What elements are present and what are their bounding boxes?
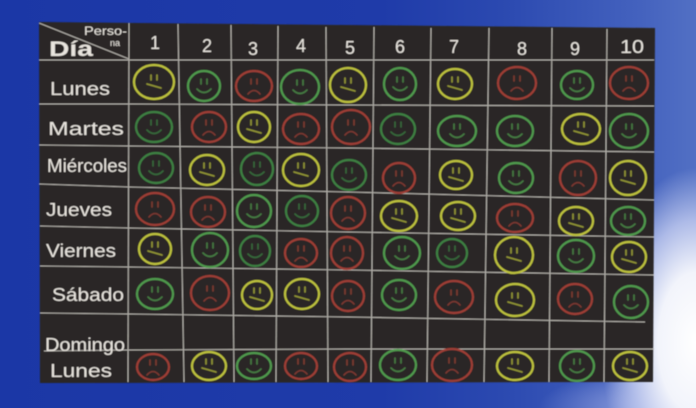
face 1 green bbox=[137, 279, 173, 309]
face 2 red bbox=[191, 197, 225, 227]
column numbers: 2 bbox=[202, 36, 212, 56]
row: Miércoles faces bbox=[139, 153, 646, 195]
face 7 red bbox=[432, 349, 472, 381]
face 5 red bbox=[334, 353, 366, 381]
face 6 green bbox=[382, 280, 416, 310]
column numbers: 4 bbox=[296, 36, 306, 56]
face 10 yellow bbox=[610, 161, 646, 195]
corner header: Día / Persona: Día bbox=[49, 38, 93, 61]
day labels: Jueves bbox=[46, 200, 112, 220]
column numbers: 6 bbox=[395, 37, 405, 57]
row: Martes faces bbox=[136, 110, 648, 148]
face 7 yellow bbox=[440, 161, 472, 189]
face 2 green bbox=[192, 233, 228, 267]
face 7 yellow bbox=[441, 202, 475, 230]
face 10 green bbox=[614, 286, 648, 318]
row: Viernes faces bbox=[139, 233, 646, 273]
face 4 red bbox=[285, 353, 317, 379]
face 7 green bbox=[438, 116, 476, 146]
face 6 green bbox=[381, 114, 415, 144]
face 2 yellow bbox=[190, 155, 224, 185]
face 8 red bbox=[498, 67, 536, 99]
face 4 red bbox=[285, 239, 317, 267]
row: Lunes faces bbox=[134, 65, 648, 104]
face 2 red bbox=[192, 112, 226, 142]
face 3 yellow bbox=[238, 112, 270, 142]
day labels: Domingo bbox=[45, 335, 125, 355]
face 4 green bbox=[286, 196, 318, 226]
face 8 red bbox=[497, 204, 533, 232]
face 3 green bbox=[240, 236, 270, 266]
face 1 green bbox=[139, 153, 173, 183]
column numbers: 10 bbox=[620, 37, 644, 57]
face 5 yellow bbox=[330, 68, 366, 102]
table grid bbox=[39, 23, 654, 382]
face 10 green bbox=[610, 114, 648, 148]
face 9 red bbox=[560, 161, 596, 195]
face 4 green bbox=[281, 70, 319, 104]
face 3 green bbox=[237, 353, 271, 379]
face 6 green bbox=[380, 350, 416, 380]
face 5 green bbox=[332, 160, 366, 190]
face 9 yellow bbox=[562, 114, 600, 144]
face 6 yellow bbox=[381, 201, 417, 231]
face 3 yellow bbox=[242, 281, 272, 309]
day labels: Miércoles bbox=[47, 156, 127, 176]
row: Sábado faces bbox=[137, 276, 648, 318]
row: Jueves faces bbox=[136, 193, 645, 235]
day labels: Lunes bbox=[50, 79, 110, 99]
column numbers: 8 bbox=[517, 39, 527, 59]
face 2 red bbox=[191, 276, 229, 310]
day labels: Sábado bbox=[52, 285, 124, 305]
corner header: Día / Persona bbox=[49, 24, 127, 61]
face 8 green bbox=[499, 163, 533, 193]
face 6 green bbox=[384, 68, 416, 100]
face 3 green bbox=[241, 153, 273, 185]
face 1 red bbox=[137, 354, 169, 380]
corner header: Día / Persona: Perso- bbox=[84, 24, 127, 38]
face 9 yellow bbox=[559, 207, 593, 235]
face 8 yellow bbox=[497, 352, 533, 380]
face 10 yellow bbox=[613, 352, 647, 380]
face 1 yellow bbox=[139, 234, 171, 264]
face 9 green bbox=[558, 240, 594, 272]
face 2 yellow bbox=[192, 352, 226, 380]
day labels: Lunes bbox=[50, 361, 112, 381]
face 8 green bbox=[497, 116, 533, 146]
face 10 red bbox=[610, 67, 648, 99]
face 9 red bbox=[558, 284, 592, 314]
face 6 green bbox=[384, 237, 420, 269]
black board bbox=[39, 22, 655, 383]
column numbers bbox=[150, 33, 644, 59]
face 7 yellow bbox=[438, 69, 472, 99]
face 9 green bbox=[561, 71, 593, 99]
column numbers: 7 bbox=[449, 37, 459, 57]
face 8 yellow bbox=[495, 237, 533, 273]
face 3 green bbox=[237, 195, 271, 227]
corner header: Día / Persona: na bbox=[110, 38, 120, 48]
column numbers: 5 bbox=[345, 38, 355, 58]
face 7 red bbox=[435, 281, 473, 313]
face 4 yellow bbox=[283, 154, 319, 186]
row: second Lunes faces bbox=[137, 349, 647, 381]
face 5 red bbox=[331, 197, 365, 229]
face 2 green bbox=[188, 71, 220, 101]
face 5 red bbox=[332, 281, 364, 311]
column numbers: 1 bbox=[150, 33, 160, 53]
face 7 green bbox=[437, 239, 467, 267]
face 1 red bbox=[136, 193, 174, 225]
face 1 green bbox=[136, 112, 172, 142]
day labels: Viernes bbox=[46, 241, 116, 261]
face 9 green bbox=[560, 351, 594, 381]
face 1 yellow bbox=[134, 65, 174, 99]
face 5 red bbox=[331, 237, 363, 269]
day labels: Martes bbox=[48, 119, 124, 139]
face 5 red bbox=[332, 110, 370, 144]
face 10 green bbox=[611, 207, 645, 235]
face 10 yellow bbox=[612, 242, 646, 272]
day labels bbox=[45, 79, 127, 381]
face 8 yellow bbox=[496, 284, 534, 316]
column numbers: 3 bbox=[248, 39, 258, 59]
column numbers: 9 bbox=[570, 39, 580, 59]
face 4 yellow bbox=[285, 279, 319, 309]
face 4 red bbox=[283, 114, 319, 144]
face 3 red bbox=[236, 71, 272, 101]
face 6 red bbox=[383, 163, 415, 193]
